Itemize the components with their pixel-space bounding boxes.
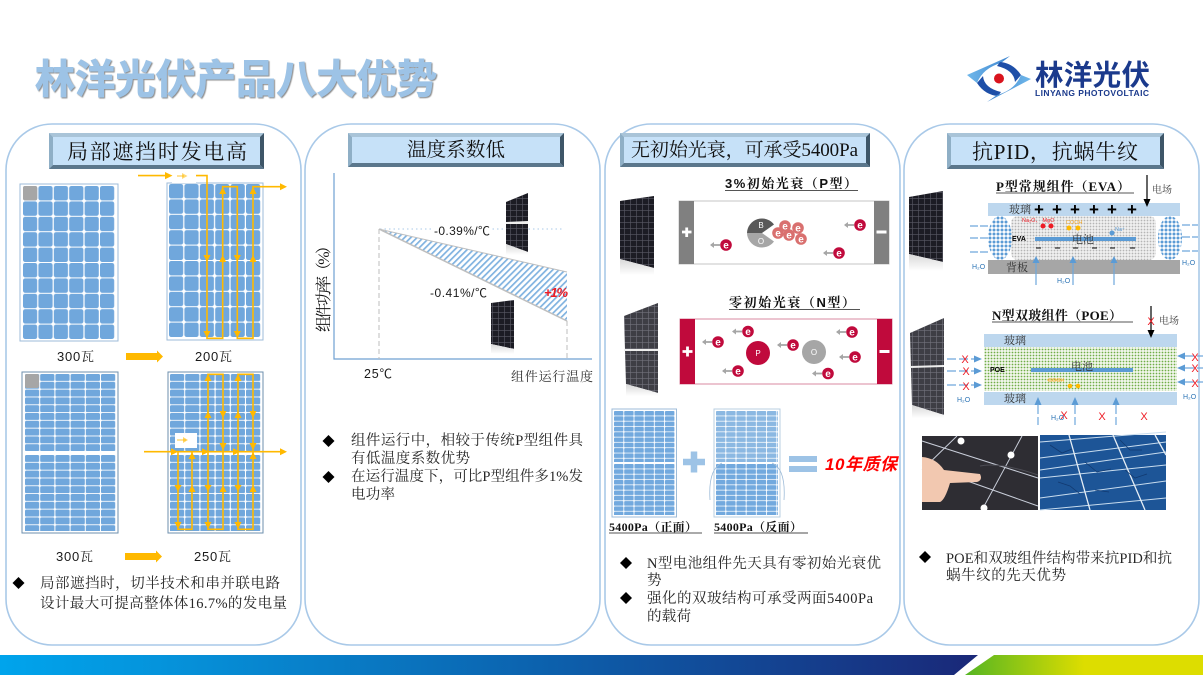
heading: P type degradation: 3%初始光衰（P型） [725, 176, 857, 191]
text: shading benefit [12, 574, 287, 612]
arrow: electric field: 电场 [1152, 183, 1172, 196]
diagram: P type cell: B [758, 221, 764, 230]
footer bar [0, 655, 1203, 675]
icon: plus [683, 452, 705, 472]
photo: hand on snail trail panel [922, 436, 1038, 512]
logo [967, 56, 1150, 102]
hatched gap [379, 229, 567, 321]
module: P type dark [909, 191, 943, 271]
diagram: N type cell: e [852, 352, 858, 364]
label: 200W: 200瓦 [195, 349, 232, 364]
diagram: P type cell: e [857, 220, 863, 232]
arrow: electric field [1144, 175, 1172, 207]
module: half cell with current path [144, 372, 287, 533]
diagram: N type cell [680, 319, 892, 384]
logo: LINYANG PHOTOVOLTAIC [1035, 88, 1149, 98]
diagram: P type cell: e [836, 248, 842, 260]
diagram: EVA cross-section: + [1127, 200, 1137, 219]
diagram: N type cell: e [790, 340, 796, 352]
heading: partial shading [49, 133, 264, 169]
diagram: N type cell: e [735, 366, 741, 378]
module: full cell with current path [138, 170, 287, 340]
label: 300W half cell: 300瓦 [56, 549, 93, 564]
heading: EVA module: P型常规组件（EVA） [996, 179, 1130, 194]
diagram: EVA cross-section: 电池 [1072, 232, 1094, 246]
heading: no initial degradation [620, 133, 870, 167]
diagram: P type cell: e [775, 228, 781, 240]
diagram: POE cross-section: X [1191, 352, 1199, 364]
diagram: EVA cross-section: + [1034, 200, 1044, 219]
chart: power vs temperature: 组件功率（%） [315, 238, 333, 332]
logo: 林洋光伏 [1035, 60, 1150, 92]
arrow [126, 350, 163, 362]
diagram: EVA cross-section: + [1070, 200, 1080, 219]
label: 250W: 250瓦 [194, 549, 231, 564]
diagram: N type cell: P [755, 349, 761, 358]
module: front load [612, 409, 676, 517]
text: temperature benefit: 组件运行中，相较于传统P型组件具 [351, 431, 584, 449]
arrow: electric field blocked [1147, 306, 1179, 338]
diagram: N type cell: e [849, 328, 855, 338]
module: half cell normal [22, 372, 118, 533]
arrow: electric field blocked: 电场 [1159, 314, 1179, 327]
text: temperature benefit: 在运行温度下，可比P型组件多1%发 [351, 467, 583, 485]
heading: anti PID [947, 133, 1164, 169]
panel: temperature coefficient [305, 124, 600, 645]
diagram: EVA cross-section: EVA [1012, 236, 1026, 243]
diagram: P type cell: e [786, 230, 792, 242]
module: P type [491, 300, 514, 354]
chart: power vs temperature: +1% [544, 285, 568, 300]
diagram: P type cell: e [782, 222, 788, 232]
diagram: EVA cross-section: H₂O [1182, 260, 1196, 267]
module: N type glass [910, 318, 944, 418]
diagram: P type cell [679, 201, 889, 264]
diagram: POE cross-section: H₂O [957, 397, 971, 404]
chart: power vs temperature: -0.39%/℃ [434, 224, 490, 238]
module: rear load [710, 409, 784, 517]
label: 300W: 300瓦 [57, 349, 94, 364]
text: N type benefit [620, 554, 882, 625]
chart: power vs temperature [315, 173, 593, 384]
diagram: POE cross-section: H₂O [1183, 394, 1197, 401]
diagram: POE cross-section: X [962, 366, 970, 378]
chart: power vs temperature: -0.41%/℃ [430, 286, 487, 300]
heading: partial shading: 局部遮挡时发电高 [67, 140, 247, 164]
diagram: POE cross-section [947, 333, 1203, 425]
panel: no initial degradation [605, 124, 900, 645]
diagram: POE cross-section: X [1140, 411, 1148, 423]
module: N type dark [624, 303, 658, 396]
text: temperature benefit [322, 431, 584, 503]
diagram: P type cell: e [795, 224, 801, 234]
diagram: POE cross-section: H₂O [1051, 415, 1065, 422]
diagram: N type cell: e [715, 338, 721, 348]
module: P type dark [620, 196, 654, 275]
panel: partial shading [6, 124, 301, 645]
diagram: EVA cross-section: H₂O [1057, 278, 1071, 285]
diagram: P type cell: O [758, 237, 764, 246]
diagram: EVA cross-section: COOH [1066, 220, 1083, 226]
text: shading benefit: 设计最大可提高整体体16.7%的发电量 [40, 594, 287, 612]
heading: N type degradation: 零初始光衰（N型） [729, 295, 855, 310]
diagram: POE cross-section: 玻璃 [1004, 333, 1026, 347]
diagram: N type cell: e [825, 369, 831, 380]
diagram: POE cross-section: COOH [1048, 378, 1065, 384]
heading: anti PID: 抗PID，抗蜗牛纹 [972, 140, 1138, 165]
diagram: EVA cross-section: Na₂O、 MgO [1022, 218, 1055, 224]
diagram: POE cross-section: 电池 [1071, 359, 1093, 373]
label: rear 5400Pa: 5400Pa（反面） [714, 519, 802, 534]
diagram: POE cross-section: X [1191, 363, 1199, 375]
heading: no initial degradation: 无初始光衰，可承受5400Pa [631, 139, 859, 161]
diagram: EVA cross-section: 玻璃 [1009, 202, 1031, 216]
label: front 5400Pa: 5400Pa（正面） [609, 519, 697, 534]
chart: power vs temperature: 25℃ [364, 367, 392, 381]
diagram: POE cross-section: POE [990, 367, 1005, 374]
module: full cell normal [20, 184, 118, 341]
diagram: EVA cross-section: Na⁺ [1115, 226, 1125, 233]
heading: temperature coefficient [348, 133, 564, 167]
text: anti PID benefit: POE和双玻组件结构带来抗PID和抗 [946, 549, 1172, 567]
diagram: POE cross-section: X [1060, 410, 1068, 422]
chart: power vs temperature: 组件运行温度 [511, 369, 593, 384]
text: anti PID benefit: 蜗牛纹的先天优势 [946, 566, 1066, 584]
diagram: N type cell: e [745, 327, 751, 338]
diagram: POE cross-section: X [1191, 378, 1199, 390]
diagram: POE cross-section: X [961, 354, 969, 366]
diagram: P type cell: e [798, 234, 804, 246]
diagram: EVA cross-section: H₂O [972, 264, 986, 271]
icon: equals [789, 456, 817, 472]
heading: temperature coefficient: 温度系数低 [407, 139, 505, 161]
arrow [125, 550, 162, 562]
label: warranty: 10年质保 [825, 455, 899, 474]
arrow: electric field blocked: X [1147, 316, 1155, 328]
text: N type benefit: N型电池组件先天具有零初始光衰优 [647, 554, 882, 572]
diagram: P type cell: e [723, 240, 729, 252]
diagram: EVA cross-section: + [1089, 200, 1099, 219]
diagram: POE cross-section: X [1098, 411, 1106, 423]
text: shading benefit: 局部遮挡时，切半技术和串并联电路 [40, 574, 280, 592]
module: N type [506, 193, 528, 255]
diagram: POE cross-section: 玻璃 [1004, 391, 1026, 405]
panel: anti PID [904, 124, 1203, 645]
text: anti PID benefit [919, 549, 1172, 584]
diagram: EVA cross-section: + [1107, 200, 1117, 219]
diagram: POE cross-section: X [962, 381, 970, 393]
photo: blue cell with snail trails [1040, 432, 1166, 510]
title: 林洋光伏产品八大优势 [35, 58, 437, 102]
diagram: N type cell: O [811, 348, 817, 357]
text: N type benefit: 势 [647, 571, 662, 589]
text: temperature benefit: 电功率 [351, 485, 395, 503]
diagram: EVA cross-section: 背板 [1006, 260, 1028, 274]
text: N type benefit: 的载荷 [647, 607, 691, 625]
heading: POE module: N型双玻组件（POE） [992, 308, 1122, 323]
diagram: EVA cross-section [970, 200, 1198, 285]
text: temperature benefit: 有低温度系数优势 [351, 449, 470, 467]
diagram: EVA cross-section: + [1052, 200, 1062, 219]
text: N type benefit: 强化的双玻结构可承受两面5400Pa [647, 589, 874, 607]
